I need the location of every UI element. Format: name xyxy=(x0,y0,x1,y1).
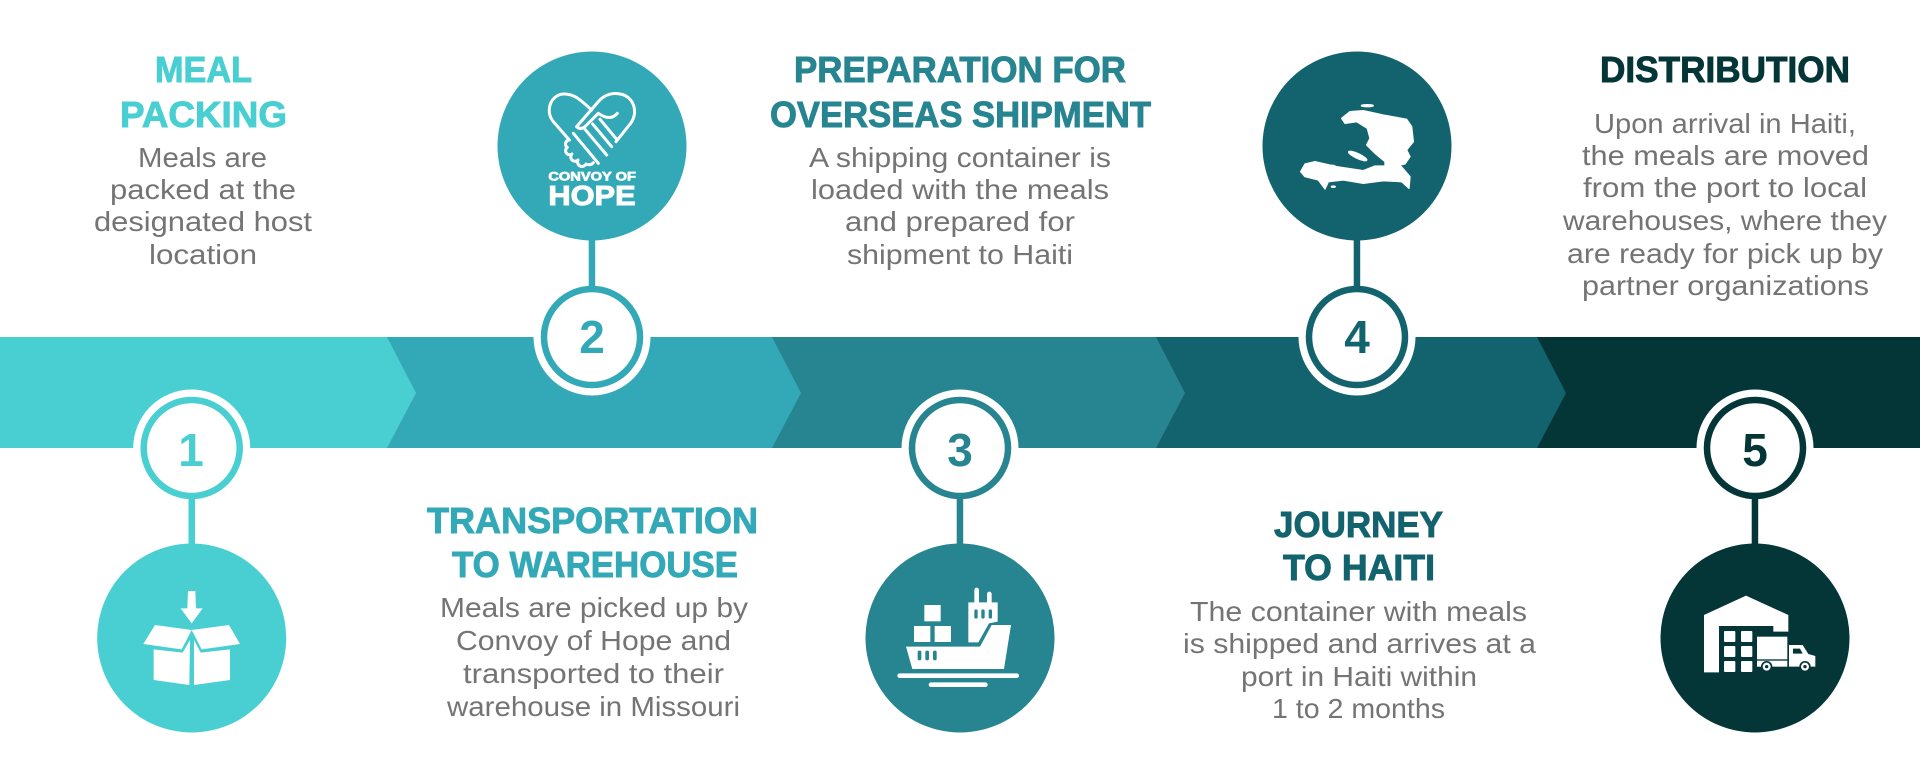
step 1 description: Meals are xyxy=(138,142,267,173)
chevron process band xyxy=(0,337,1920,448)
icon: Convoy of Hope handshake heart logo: CONVOY OF xyxy=(548,170,636,184)
icon: open box with arrow xyxy=(143,591,240,685)
step 2 icon circle xyxy=(498,52,686,240)
step 2: transportation to warehouse xyxy=(427,52,758,722)
step 5 number badge: 5 xyxy=(1742,424,1768,476)
step 5 number badge xyxy=(1696,390,1814,496)
step 2 description xyxy=(440,592,748,722)
step 3 heading: OVERSEAS SHIPMENT xyxy=(770,94,1151,135)
step 5 description: from the port to local xyxy=(1583,172,1867,203)
step 1 heading xyxy=(120,49,287,135)
icon: warehouse and delivery truck xyxy=(1704,596,1815,672)
step 3 description: loaded with the meals xyxy=(811,174,1109,205)
step 1 heading: PACKING xyxy=(120,94,287,135)
step 3 icon circle xyxy=(866,544,1054,732)
icon: map of Haiti xyxy=(1301,105,1413,189)
step 3 heading: PREPARATION FOR xyxy=(794,49,1126,90)
step 2 number badge: 2 xyxy=(579,311,605,363)
step 2 heading: TRANSPORTATION xyxy=(427,500,758,541)
step 3 number badge xyxy=(902,390,1018,496)
step 5: distribution xyxy=(1562,49,1887,732)
step 4 icon circle xyxy=(1262,52,1452,240)
step 5 description xyxy=(1562,108,1887,301)
step 4 number badge: 4 xyxy=(1344,311,1370,363)
step 5 description: are ready for pick up by xyxy=(1567,238,1883,269)
step 5 description: the meals are moved xyxy=(1582,140,1869,171)
step 5 icon circle xyxy=(1660,544,1850,732)
step 4 heading: TO HAITI xyxy=(1283,547,1435,588)
step 3: preparation for overseas shipment xyxy=(770,49,1151,732)
step 2 description: Convoy of Hope and xyxy=(456,625,731,656)
step 2 heading: TO WAREHOUSE xyxy=(452,544,738,585)
step 1 icon circle xyxy=(97,544,286,732)
step 1 description: designated host xyxy=(94,206,312,237)
icon: Convoy of Hope handshake heart logo xyxy=(548,94,636,211)
step 1 description: packed at the xyxy=(110,174,296,205)
step 5 description: warehouses, where they xyxy=(1562,205,1887,236)
step 3 number badge: 3 xyxy=(947,424,973,476)
icon: Convoy of Hope handshake heart logo: HOPE xyxy=(548,180,636,211)
step 2 number badge xyxy=(534,278,650,396)
step 3 description: and prepared for xyxy=(845,206,1075,237)
step 3 description: A shipping container is xyxy=(809,142,1111,173)
icon: cargo ship xyxy=(897,588,1019,687)
step 4 number badge xyxy=(1298,278,1416,396)
step 3 heading xyxy=(770,49,1151,135)
step 5 description: partner organizations xyxy=(1582,270,1869,301)
step 1 connector xyxy=(188,499,195,549)
step 4 heading xyxy=(1274,504,1443,588)
step 1 description: location xyxy=(149,239,257,270)
step 1 description xyxy=(94,142,312,270)
step 4 description: 1 to 2 months xyxy=(1272,693,1445,724)
step 4 description xyxy=(1183,596,1536,724)
step 4 description: is shipped and arrives at a xyxy=(1183,628,1536,659)
step 4 description: port in Haiti within xyxy=(1241,661,1477,692)
step 3 description: shipment to Haiti xyxy=(847,239,1073,270)
step 4 description: The container with meals xyxy=(1190,596,1527,627)
step 2 description: warehouse in Missouri xyxy=(446,691,740,722)
step 3 description xyxy=(809,142,1111,270)
step 2 description: transported to their xyxy=(463,658,724,689)
step 4 connector xyxy=(1354,236,1360,288)
step 5 description: Upon arrival in Haiti, xyxy=(1594,108,1856,139)
step 2 description: Meals are picked up by xyxy=(440,592,748,623)
step 5 connector xyxy=(1752,499,1758,549)
step 1: meal packing xyxy=(94,49,312,732)
step 4 heading: JOURNEY xyxy=(1274,504,1443,545)
step 1 heading: MEAL xyxy=(155,49,252,90)
step 4: journey to Haiti xyxy=(1183,52,1536,724)
step 1 number badge: 1 xyxy=(178,424,204,476)
step 2 connector xyxy=(589,236,595,288)
step 5 heading: DISTRIBUTION xyxy=(1600,49,1850,90)
step 1 number badge xyxy=(133,390,250,496)
step 3 connector xyxy=(957,499,963,549)
step 2 heading xyxy=(427,500,758,585)
